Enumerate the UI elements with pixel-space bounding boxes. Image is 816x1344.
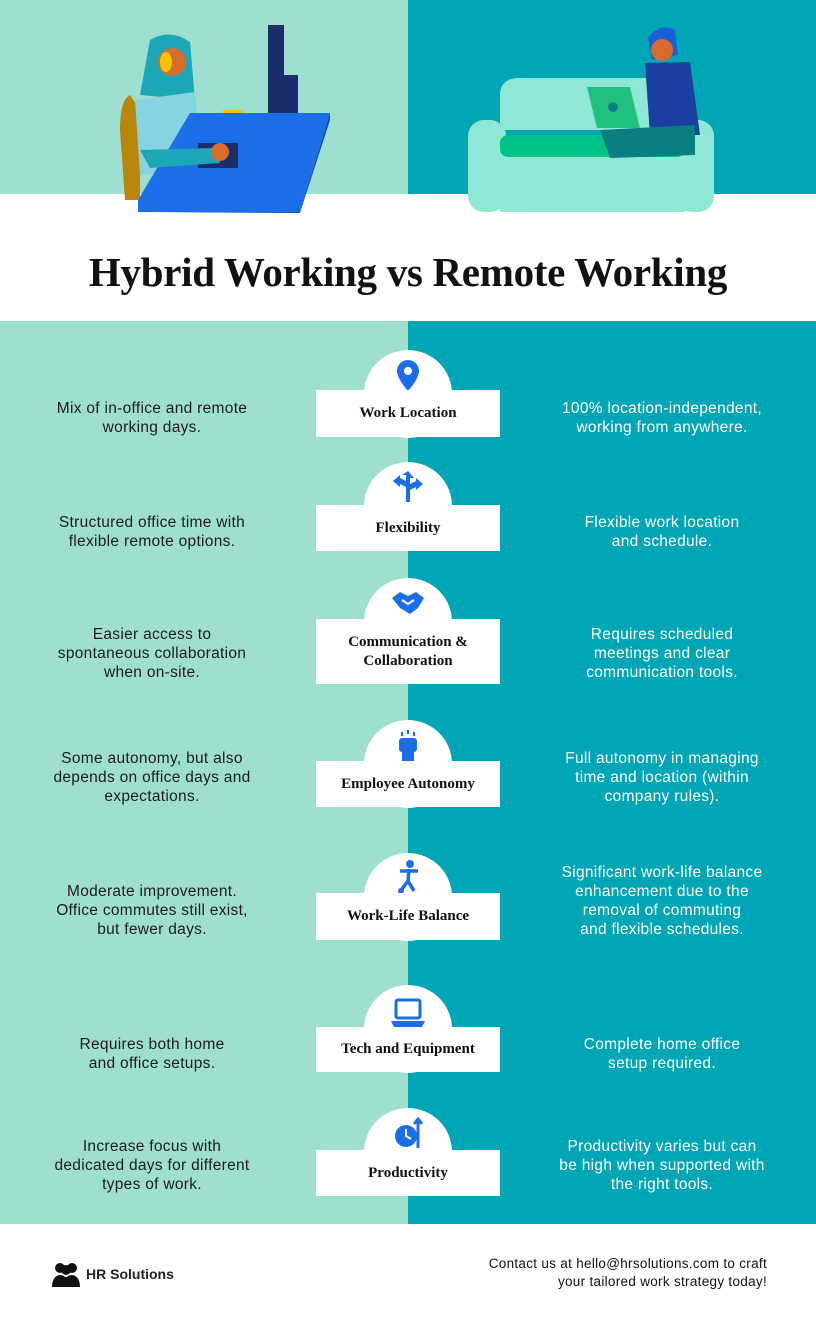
row: work-life balance [56,853,762,941]
row: work location [57,350,762,438]
contact text: your tailored work strategy today! [558,1274,767,1289]
remote text [585,514,739,550]
row: communication [58,578,738,684]
hybrid text: Easier access to [93,626,211,643]
remote text [565,750,759,805]
remote text: Complete home office [584,1036,740,1053]
remote text: setup required. [608,1055,716,1072]
hybrid text [59,514,245,550]
hybrid text: flexible remote options. [69,533,235,550]
top band left [0,0,408,194]
remote text: communication tools. [586,664,738,681]
label [316,1027,500,1072]
remote text: the right tools. [611,1176,713,1193]
hybrid text: depends on office days and [53,769,251,786]
label: Communication & [348,634,468,650]
hybrid text [56,883,248,938]
remote text: 100% location-independent, [562,400,762,417]
hybrid text: Requires both home [80,1036,224,1053]
remote text: and schedule. [612,533,712,550]
contact text [489,1256,767,1289]
remote text: Requires scheduled [591,626,733,643]
hybrid text: Moderate improvement. [67,883,237,900]
remote text [559,1138,765,1193]
row: tech [80,985,740,1073]
hybrid text: Increase focus with [83,1138,221,1155]
remote text [584,1036,740,1072]
remote text: Full autonomy in managing [565,750,759,767]
icon: raised fist [399,730,417,761]
remote text: time and location (within [575,769,749,786]
contact text: Contact us at hello@hrsolutions.com to craft [489,1256,767,1271]
remote text [586,626,738,681]
remote text: Flexible work location [585,514,739,531]
icon: handshake [392,592,424,614]
illustration: woman at desk [120,25,330,213]
hybrid text [80,1036,224,1072]
label: Productivity [368,1164,448,1180]
hybrid text [58,626,246,681]
hybrid text: Office commutes still exist, [56,902,248,919]
row: productivity [54,1108,765,1196]
remote text [562,864,762,938]
hybrid text: working days. [103,419,201,436]
label: Work Location [359,405,457,421]
remote text: enhancement due to the [575,883,749,900]
label: Flexibility [376,520,440,536]
hybrid text: types of work. [102,1176,202,1193]
logo: HR Solutions [52,1263,174,1287]
hybrid text: Some autonomy, but also [61,750,243,767]
hybrid text [54,1138,250,1193]
hybrid text [53,750,251,805]
hybrid text: and office setups. [89,1055,215,1072]
label [316,505,500,551]
remote text: Productivity varies but can [567,1138,756,1155]
illustration: man on couch [468,27,714,212]
hybrid text: spontaneous collaboration [58,645,246,662]
remote text: removal of commuting [583,902,741,919]
icon: map pin [397,360,419,390]
label [316,619,500,684]
remote text: Significant work-life balance [562,864,762,881]
label [316,1150,500,1196]
label: Collaboration [363,652,453,668]
icon: people [52,1263,80,1287]
hybrid text: expectations. [104,788,200,805]
label: Employee Autonomy [341,776,475,792]
hybrid text [57,400,247,436]
icon: clock with arrows [395,1116,424,1148]
icon: split arrows [393,471,423,502]
hybrid text: Mix of in-office and remote [57,400,247,417]
title: Hybrid Working vs Remote Working [89,249,727,295]
remote text: meetings and clear [594,645,730,662]
comparison panel [0,321,816,1224]
label: Tech and Equipment [341,1041,475,1057]
panel: remote side background [408,321,816,1224]
label: Work-Life Balance [347,908,469,924]
panel: hybrid side background [0,321,408,1224]
remote text: and flexible schedules. [580,921,744,938]
logo: HR Solutions: HR Solutions [86,1266,174,1282]
remote text: be high when supported with [559,1157,765,1174]
remote text [562,400,762,436]
icon: person balancing [398,860,418,893]
remote text: working from anywhere. [576,419,748,436]
row: autonomy [53,720,759,808]
top band right [408,0,816,194]
hybrid text: Structured office time with [59,514,245,531]
hybrid text: dedicated days for different [54,1157,250,1174]
row: flexibility [59,462,739,551]
remote text: company rules). [605,788,719,805]
label [316,893,500,940]
hybrid text: but fewer days. [97,921,207,938]
label [316,390,500,437]
icon: laptop [391,998,425,1027]
label [316,761,500,807]
hybrid text: when on-site. [104,664,200,681]
